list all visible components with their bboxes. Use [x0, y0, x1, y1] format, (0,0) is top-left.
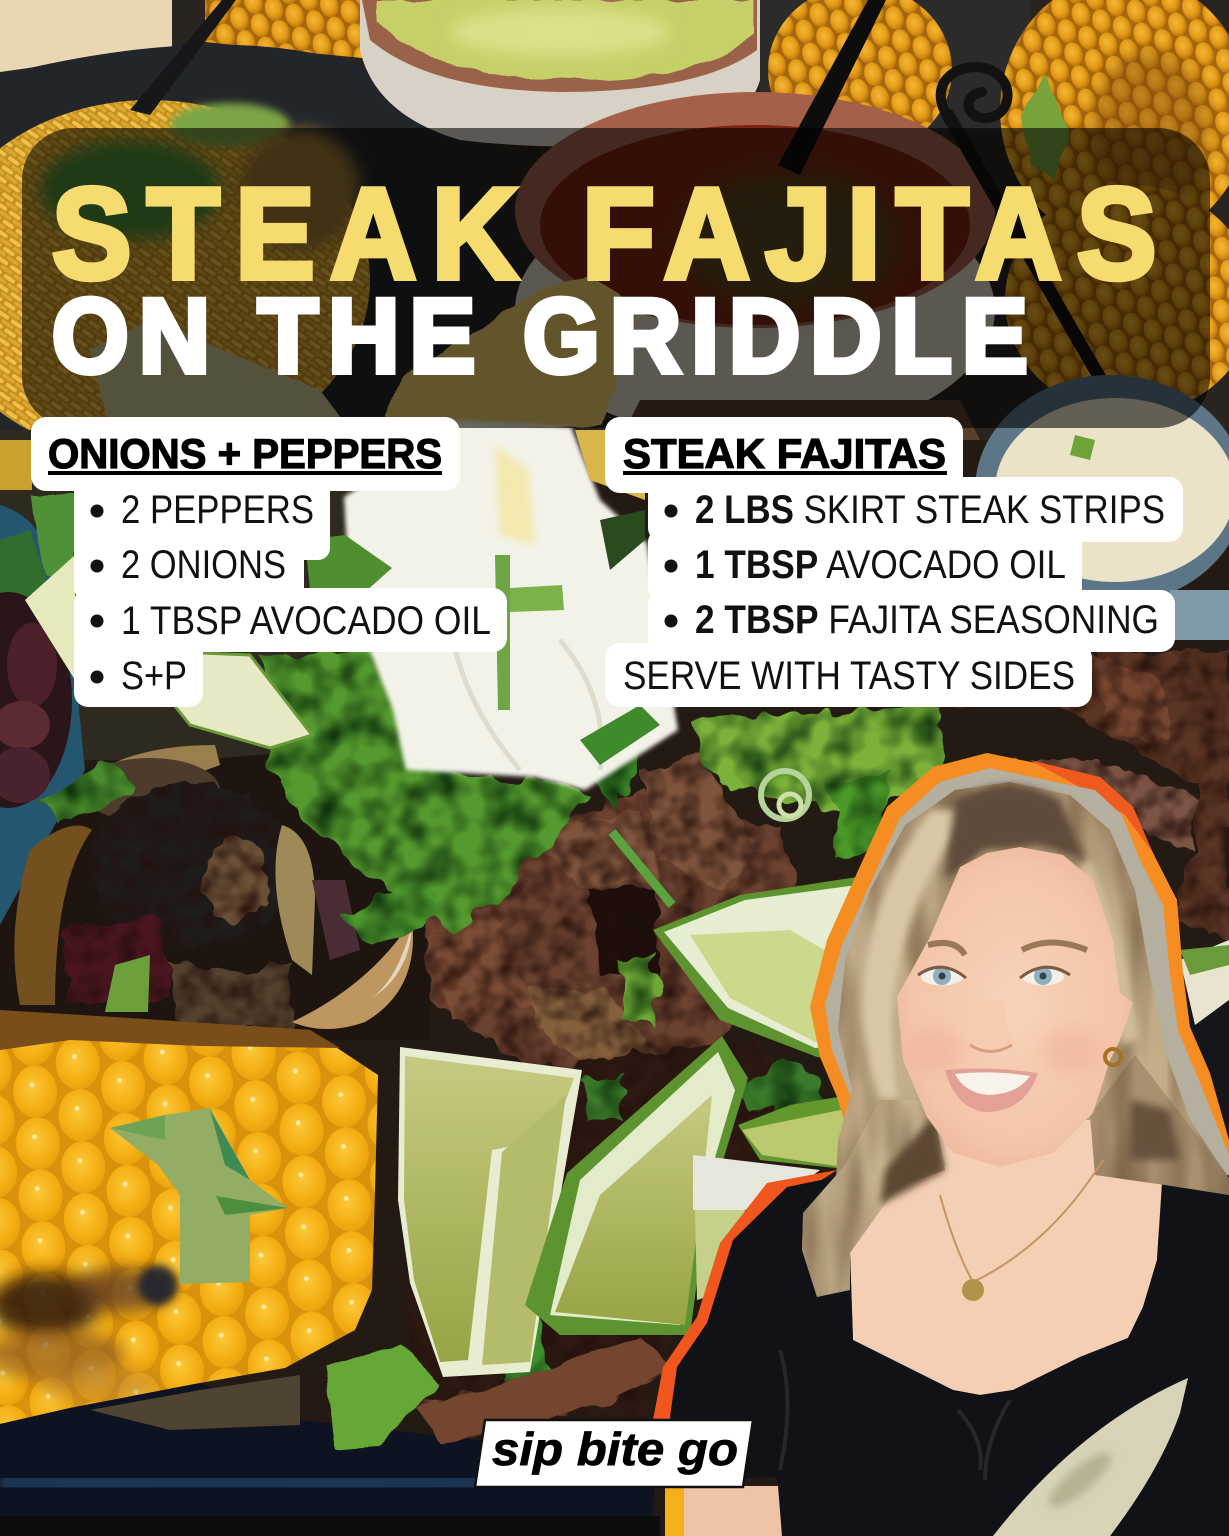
- necklace: [940, 1160, 1103, 1301]
- lime wedges: [398, 877, 860, 1377]
- hair: [835, 782, 1229, 1210]
- smile: [945, 1069, 1038, 1112]
- list items: S+P: [121, 654, 187, 698]
- lower right hair: [1090, 1055, 1229, 1195]
- cilantro and lettuce: [40, 650, 945, 1385]
- left side bowls: beans, lettuce and lime: [0, 430, 350, 925]
- logo: sip bite go: sip bite go: [492, 1423, 738, 1475]
- knife blade: [993, 1378, 1188, 1536]
- earring: [1105, 1049, 1121, 1065]
- list items: 2 PEPPERS: [121, 488, 314, 532]
- list items: [623, 488, 1165, 698]
- black top: [670, 1172, 1229, 1536]
- list items: 1 TBSP AVOCADO OIL: [695, 543, 1066, 587]
- list items: [90, 488, 491, 698]
- steak strips: [400, 650, 1229, 1445]
- forearm: [684, 1486, 782, 1536]
- list items: SERVE WITH TASTY SIDES: [623, 654, 1075, 698]
- photo cutout: woman portrait: [653, 753, 1229, 1536]
- pale halo around hair: [825, 768, 1229, 1230]
- heading: ONIONS + PEPPERS: [48, 430, 442, 477]
- list items: 2 LBS SKIRT STEAK STRIPS: [695, 488, 1165, 532]
- lime wedge behind list: [130, 650, 312, 748]
- heading: STEAK FAJITAS: [623, 430, 946, 477]
- red-orange outline around shoulder: [653, 1170, 837, 1420]
- title backing panel: [22, 128, 1210, 428]
- hair highlights: [862, 810, 975, 1100]
- corn on the cob: [0, 1010, 378, 1424]
- panel: steak fajitas ingredients: [605, 417, 1183, 707]
- logo: sip bite go: [475, 1420, 753, 1487]
- scallion rings and stem: [612, 771, 809, 905]
- eyes: [918, 967, 1070, 986]
- onions and mushrooms: [0, 740, 430, 1040]
- cilantro leaf on corn: [110, 1108, 288, 1284]
- list items: 2 TBSP FAJITA SEASONING: [695, 598, 1159, 642]
- curled skewer: [941, 67, 1130, 430]
- chest and neck: [850, 1120, 1162, 1395]
- subtitle: on the griddle: ON THE GRIDDLE: [52, 278, 1038, 395]
- dark plate rim: [0, 1338, 670, 1536]
- yellow outline below logo: [665, 1485, 685, 1536]
- nose: [970, 1000, 1012, 1054]
- sour cream: [305, 420, 678, 790]
- face: [897, 847, 1133, 1167]
- cheeks: [907, 1028, 963, 1072]
- orange outline around hair: [810, 753, 1229, 1230]
- top dishes: rice, guacamole, salsa and grilled corn: [0, 0, 1229, 605]
- dark hair part: [945, 785, 1085, 880]
- panel: onions and peppers ingredients: [31, 417, 507, 707]
- hair waves over shoulder: [802, 1100, 945, 1297]
- eyebrows: [928, 942, 1087, 955]
- list items: 1 TBSP AVOCADO OIL: [121, 599, 491, 643]
- list items: 2 ONIONS: [121, 543, 286, 587]
